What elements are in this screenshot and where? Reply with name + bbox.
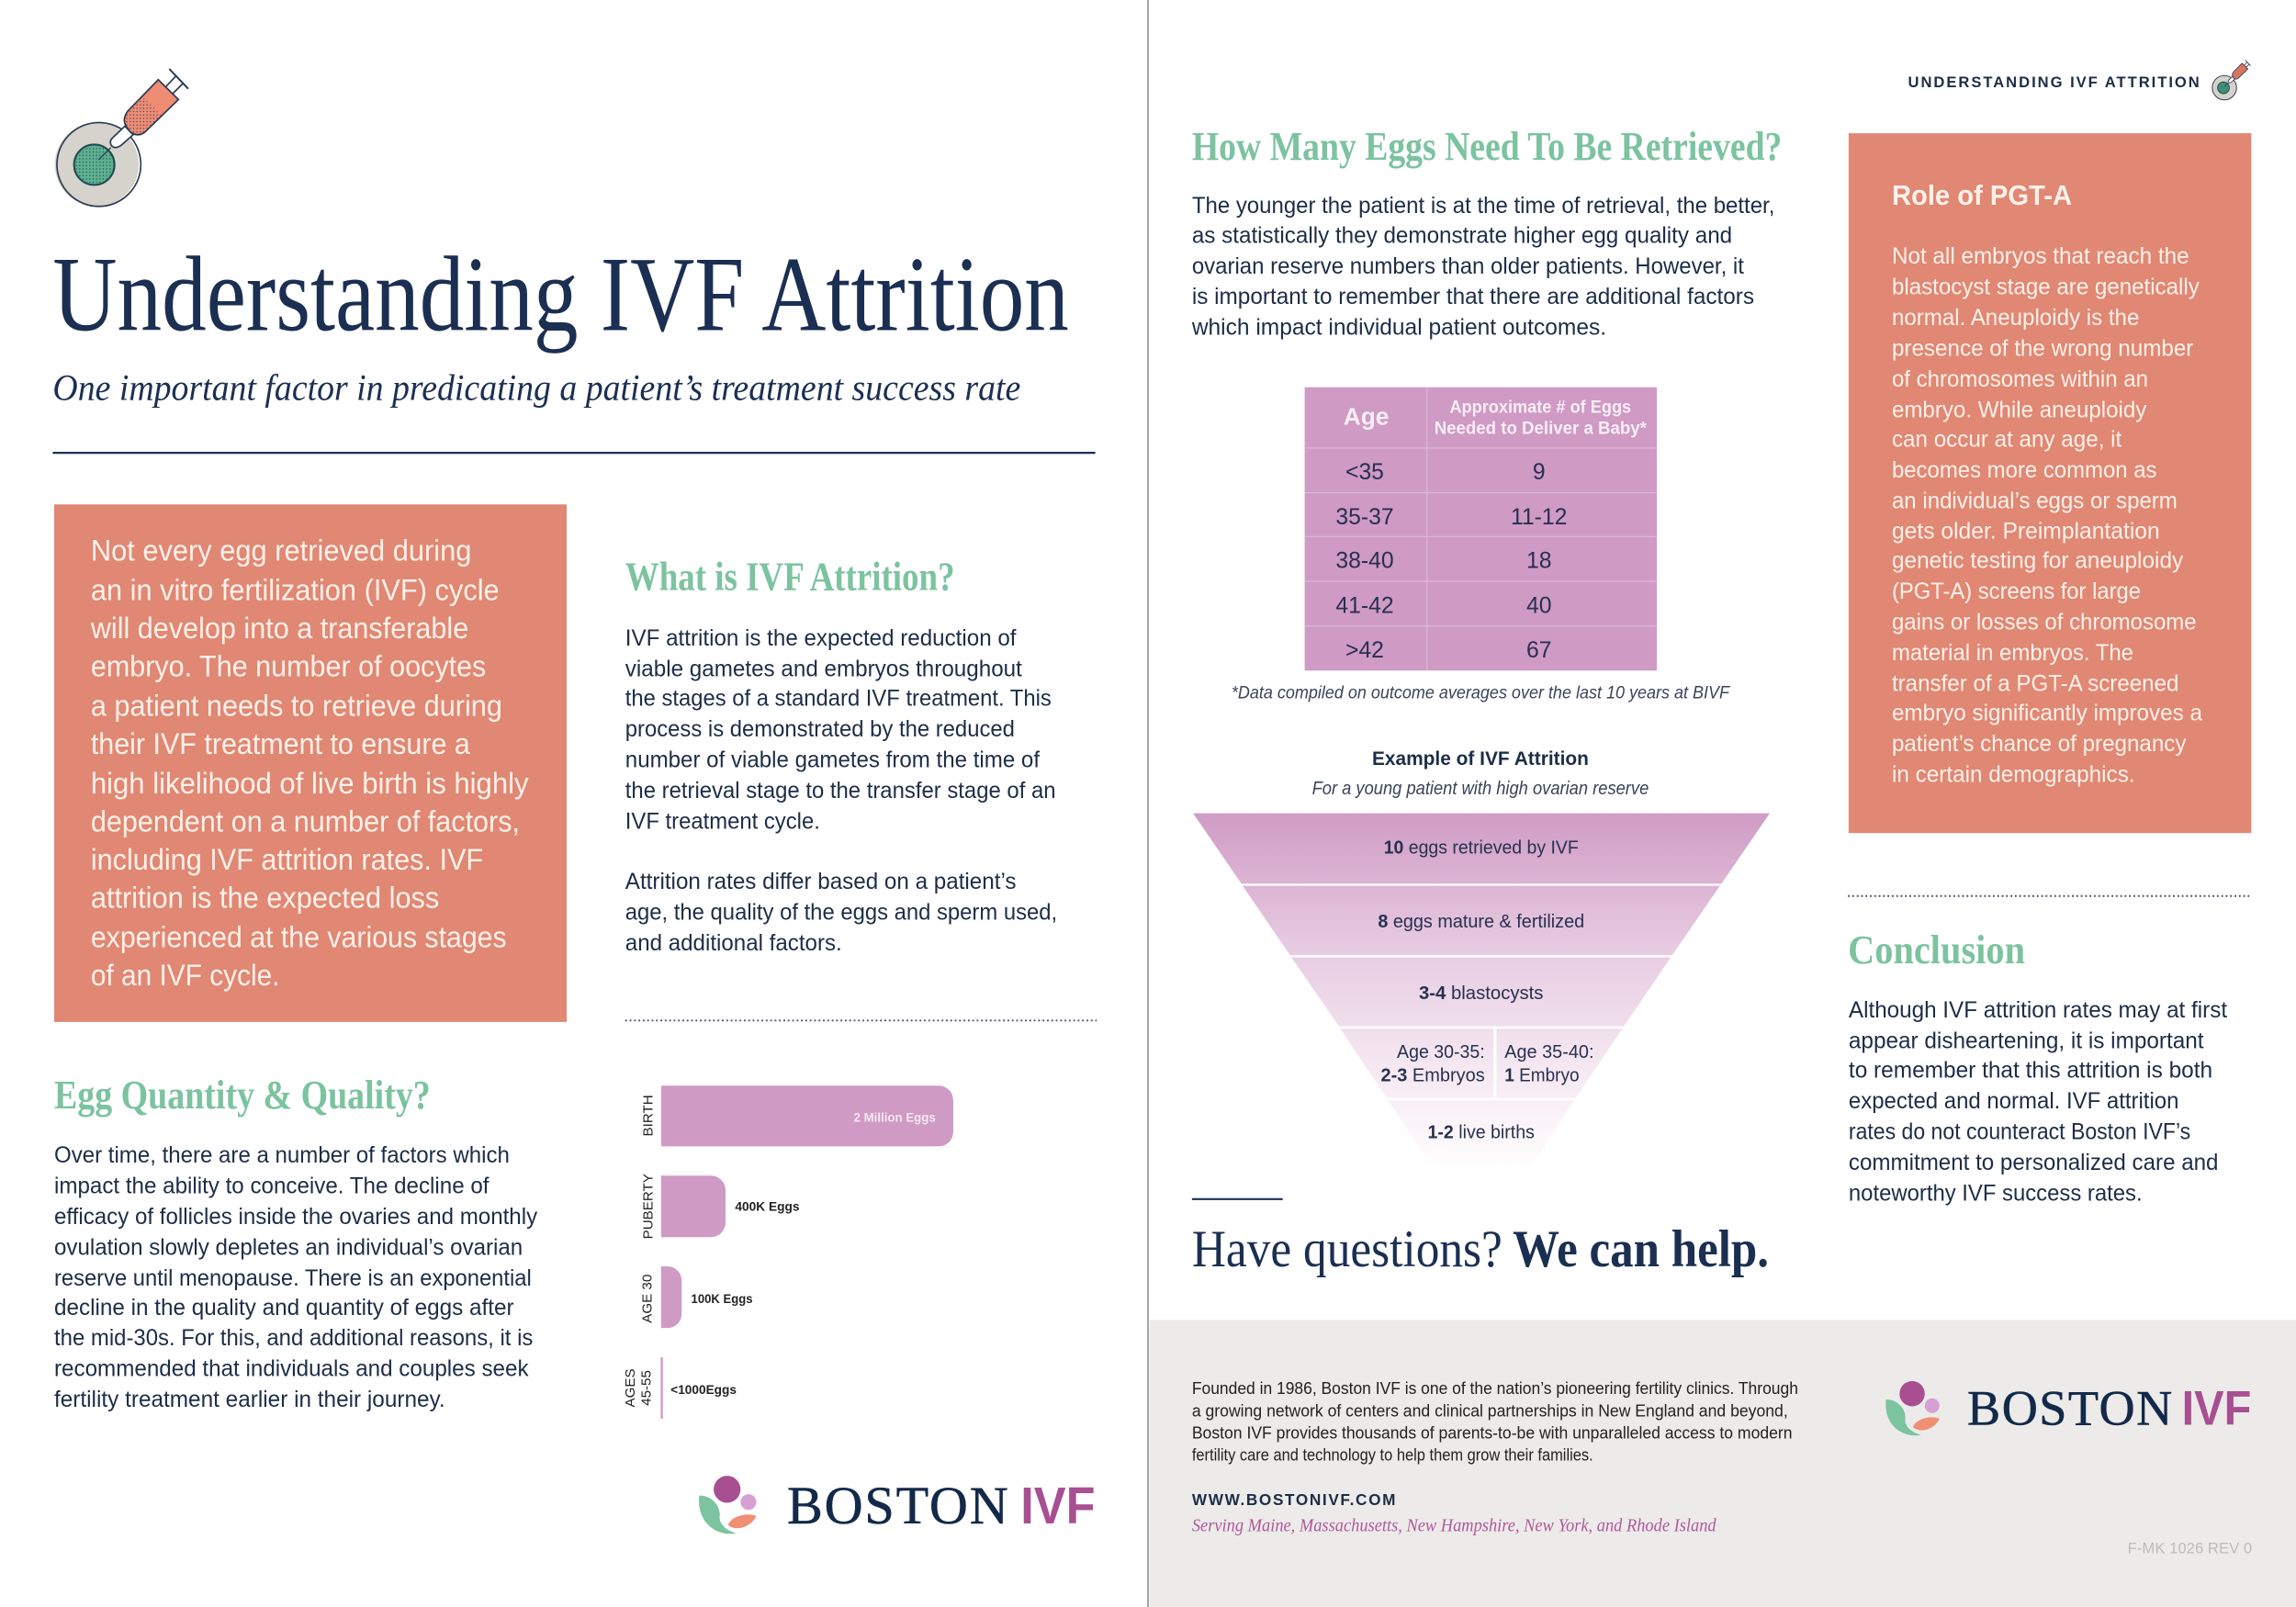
table footnote: *Data compiled on outcome averages over the last 10 years at BIVF — [1232, 684, 1730, 703]
text block: egg quantity and quality: impact the ability to conceive. The decline of — [54, 1173, 490, 1198]
table rows: 9 — [1533, 460, 1546, 485]
intro text: their IVF treatment to ensure a — [91, 726, 470, 760]
intro text: high likelihood of live birth is highly — [91, 766, 529, 800]
footer about text: a growing network of centers and clinical partnerships in New England and beyond, — [1192, 1401, 1788, 1421]
table rows: 67 — [1526, 638, 1551, 663]
website: WWW.BOSTONIVF.COM — [1192, 1490, 1395, 1509]
logo: Boston IVF, left page: BOSTON — [787, 1476, 1008, 1535]
funnel stage: blastocysts: 3-4 blastocysts — [1419, 983, 1543, 1004]
panel text: becomes more common as — [1892, 457, 2157, 483]
intro text: dependent on a number of factors, — [91, 804, 520, 838]
intro text — [90, 534, 529, 992]
bar: puberty: PUBERTY — [640, 1174, 656, 1239]
text block: conclusion: rates do not counteract Boston IVF’s — [1849, 1118, 2190, 1144]
call to action: Have questions? — [1192, 1220, 1503, 1278]
intro text: attrition is the expected loss — [91, 881, 439, 915]
intro text: of an IVF cycle. — [91, 958, 280, 992]
bar: age 30 — [640, 1266, 753, 1328]
text block: egg quantity and quality: decline in the quality and quantity of eggs after — [54, 1295, 514, 1320]
panel text: gains or losses of chromosome — [1892, 610, 2197, 635]
text block: conclusion: expected and normal. IVF attrition — [1849, 1088, 2178, 1114]
funnel stage: embryos age 35-40: 1 Embryo — [1504, 1064, 1580, 1085]
text block: how many eggs: The younger the patient is at the time of retrieval, the better, — [1192, 193, 1774, 219]
table rows: >42 — [1345, 638, 1384, 663]
text block: egg quantity and quality: ovulation slowly depletes an individual’s ovarian — [54, 1234, 523, 1260]
call to action: We can help. — [1513, 1220, 1769, 1278]
funnel stage: embryos age 30-35: 2-3 Embryos — [1381, 1064, 1485, 1085]
icon: small syringe and dish — [2212, 60, 2251, 100]
title: Understanding IVF Attrition — [52, 236, 1069, 354]
bar: age 30: 100K Eggs — [692, 1292, 753, 1306]
panel text: of chromosomes within an — [1892, 366, 2148, 392]
bar: ages 45-55: AGES — [623, 1368, 638, 1407]
text block: what is IVF attrition — [625, 625, 1057, 956]
funnel subheading: For a young patient with high ovarian reserve — [1312, 779, 1649, 799]
table header — [1344, 399, 1647, 439]
panel text: Not all embryos that reach the — [1892, 243, 2189, 269]
text block: what is IVF attrition: IVF treatment cycle. — [625, 808, 820, 834]
intro text: an in vitro fertilization (IVF) cycle — [91, 573, 500, 607]
text block: how many eggs: as statistically they demonstrate higher egg quality and — [1192, 223, 1732, 249]
funnel stage: embryos age 35-40: Age 35-40: — [1504, 1041, 1593, 1062]
panel text: transfer of a PGT-A screened — [1892, 671, 2178, 697]
table rows: 35-37 — [1335, 505, 1394, 530]
heading: conclusion: Conclusion — [1848, 927, 2025, 972]
funnel heading: Example of IVF Attrition — [1372, 747, 1589, 770]
form code: F-MK 1026 REV 0 — [2128, 1540, 2252, 1557]
panel text: normal. Aneuploidy is the — [1892, 305, 2139, 331]
funnel stage: embryos age 35-40 — [1504, 1041, 1593, 1085]
text block: what is IVF attrition: and additional factors. — [625, 930, 842, 956]
text block: conclusion: Although IVF attrition rates may at first — [1849, 997, 2227, 1023]
logo: Boston IVF, footer: IVF — [2182, 1382, 2251, 1436]
table: eggs needed by age — [1305, 388, 1657, 670]
heading: egg quantity and quality: Egg Quantity & Quality? — [54, 1072, 431, 1118]
text block: conclusion: noteworthy IVF success rates. — [1849, 1180, 2143, 1206]
logo: Boston IVF, footer — [1885, 1381, 2251, 1436]
text block: egg quantity and quality: recommended that individuals and couples seek — [54, 1356, 529, 1382]
text block: what is IVF attrition: the stages of a standard IVF treatment. This — [625, 685, 1052, 711]
heading: what is IVF attrition: What is IVF Attrition? — [625, 554, 955, 600]
funnel: IVF attrition — [1193, 814, 1770, 1172]
panel text: can occur at any age, it — [1892, 426, 2122, 452]
panel text: presence of the wrong number — [1892, 335, 2193, 361]
text block: what is IVF attrition: age, the quality of the eggs and sperm used, — [625, 899, 1057, 925]
bar chart: egg counts by age — [623, 1085, 953, 1419]
bar: birth: BIRTH — [640, 1095, 656, 1136]
bar: ages 45-55: 45-55 — [639, 1370, 655, 1406]
panel heading: Role of PGT-A — [1892, 181, 2072, 211]
logo: Boston IVF, left page: IVF — [1020, 1477, 1096, 1534]
bar: puberty: 400K Eggs — [735, 1200, 800, 1214]
table rows: 18 — [1526, 549, 1551, 574]
icon: syringe and petri dish — [55, 69, 188, 207]
bar: ages 45-55 — [623, 1357, 737, 1419]
panel text: patient’s chance of pregnancy — [1892, 731, 2187, 757]
intro text: Not every egg retrieved during — [91, 534, 471, 568]
bar: ages 45-55: <1000Eggs — [670, 1383, 737, 1397]
text block: egg quantity and quality: efficacy of follicles inside the ovaries and monthly — [54, 1204, 538, 1230]
text block: egg quantity and quality: the mid-30s. For this, and additional reasons, it is — [54, 1325, 533, 1351]
text block: conclusion: appear disheartening, it is important — [1849, 1028, 2204, 1054]
text block: what is IVF attrition: viable gametes and embryos throughout — [625, 657, 1022, 682]
panel text: gets older. Preimplantation — [1892, 519, 2160, 545]
intro text: including IVF attrition rates. IVF — [91, 842, 483, 876]
funnel stage: 8 eggs: 8 eggs mature & fertilized — [1378, 911, 1584, 932]
text block: how many eggs: ovarian reserve numbers than older patients. However, it — [1192, 253, 1744, 279]
panel: role of PGT-A — [1849, 133, 2251, 833]
panel text: material in embryos. The — [1892, 640, 2133, 666]
text block: egg quantity and quality: Over time, there are a number of factors which — [54, 1142, 510, 1168]
bar: birth: 2 Million Eggs — [854, 1110, 936, 1124]
table rows: <35 — [1345, 460, 1384, 485]
footer about text: Founded in 1986, Boston IVF is one of the nation’s pioneering fertility clinics. Through — [1192, 1378, 1798, 1398]
centre fold divider — [1147, 0, 1149, 1607]
text block: what is IVF attrition: process is demonstrated by the reduced — [625, 716, 1015, 742]
text block: egg quantity and quality: reserve until menopause. There is an exponential — [54, 1265, 532, 1291]
panel text: (PGT-A) screens for large — [1892, 579, 2141, 604]
intro text: will develop into a transferable — [90, 611, 468, 645]
funnel stage: 10 eggs: 10 eggs retrieved by IVF — [1384, 837, 1579, 859]
text block: how many eggs: is important to remember that there are additional factors — [1192, 284, 1754, 309]
footer about text: fertility care and technology to help them grow their families. — [1192, 1444, 1593, 1464]
panel text: in certain demographics. — [1892, 761, 2135, 787]
funnel stage: embryos age 30-35 — [1381, 1041, 1485, 1085]
subtitle: One important factor in predicating a patient’s treatment success rate — [52, 366, 1020, 408]
text block: how many eggs — [1191, 193, 1774, 340]
table rows: 11-12 — [1511, 505, 1567, 530]
table header: Age — [1344, 402, 1389, 430]
table rows: 41-42 — [1335, 593, 1394, 618]
call to action — [1192, 1220, 1769, 1278]
funnel stage: embryos age 30-35: Age 30-35: — [1397, 1041, 1485, 1062]
text block: what is IVF attrition: number of viable gametes from the time of — [625, 747, 1040, 772]
service area: Serving Maine, Massachusetts, New Hampshire, New York, and Rhode Island — [1192, 1516, 1716, 1536]
intro text: a patient needs to retrieve during — [91, 689, 502, 723]
funnel stage: live births: 1-2 live births — [1428, 1122, 1535, 1143]
bar: age 30: AGE 30 — [640, 1275, 656, 1323]
bar: puberty — [640, 1174, 800, 1239]
running header: UNDERSTANDING IVF ATTRITION — [1908, 73, 2200, 91]
intro text: embryo. The number of oocytes — [91, 649, 486, 683]
footer about text — [1192, 1378, 1798, 1464]
heading: how many eggs: How Many Eggs Need To Be Retrieved? — [1192, 123, 1782, 169]
intro text: experienced at the various stages — [91, 920, 507, 954]
panel text: embryo significantly improves a — [1892, 700, 2202, 725]
panel text: genetic testing for aneuploidy — [1892, 548, 2184, 574]
bar: birth — [640, 1085, 953, 1146]
table rows: 40 — [1526, 593, 1551, 618]
table header: Needed to Deliver a Baby* — [1435, 420, 1647, 439]
text block: conclusion — [1849, 997, 2227, 1206]
table header: Approximate # of Eggs — [1449, 399, 1631, 418]
table rows — [1335, 460, 1567, 663]
text block: conclusion: to remember that this attrition is both — [1849, 1057, 2212, 1083]
logo: Boston IVF, footer: BOSTON — [1967, 1381, 2172, 1436]
panel text: blastocyst stage are genetically — [1892, 274, 2200, 299]
running header — [1908, 60, 2251, 100]
text block: conclusion: commitment to personalized care and — [1849, 1150, 2218, 1175]
text block: what is IVF attrition: Attrition rates differ based on a patient’s — [625, 869, 1017, 894]
text block: egg quantity and quality: fertility treatment earlier in their journey. — [54, 1387, 445, 1412]
panel: footer — [1150, 1320, 2296, 1607]
text block: what is IVF attrition: IVF attrition is the expected reduction of — [625, 625, 1017, 651]
footer about text: Boston IVF provides thousands of parents-to-be with unparalleled access to modern — [1192, 1422, 1793, 1442]
text block: egg quantity and quality — [54, 1142, 538, 1412]
panel text: embryo. While aneuploidy — [1892, 397, 2147, 422]
panel text: an individual’s eggs or sperm — [1892, 488, 2178, 513]
text block: what is IVF attrition: the retrieval stage to the transfer stage of an — [625, 778, 1056, 804]
table rows: 38-40 — [1335, 549, 1394, 574]
panel text — [1892, 243, 2202, 787]
logo: Boston IVF, left page — [699, 1476, 1096, 1535]
panel: intro callout — [54, 504, 567, 1022]
text block: how many eggs: which impact individual patient outcomes. — [1191, 314, 1606, 340]
